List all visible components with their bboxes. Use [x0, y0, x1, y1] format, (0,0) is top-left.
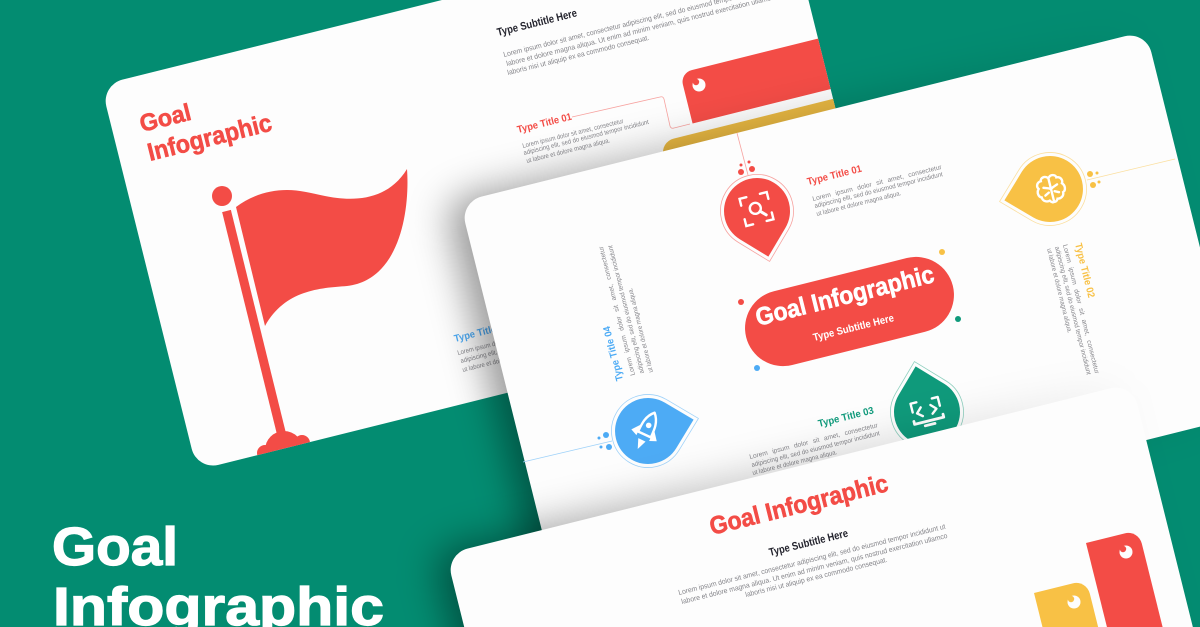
text block: type title 04: adipiscing elit, sed do eiusmod tempor incididunt: [607, 244, 646, 374]
icon: red flag on pole: [212, 169, 407, 469]
text block: type title 04: [598, 244, 655, 382]
shadow of front slide: [432, 381, 1200, 627]
text block: type title 03: adipiscing elit, sed do eiusmod tempor incididunt: [751, 430, 881, 469]
heading: main title: [52, 517, 384, 627]
text block: type title 02: adipiscing elit, sed do eiusmod tempor incididunt: [1053, 246, 1092, 376]
text block: type title 02: ut labore et dolore magna aliqua.: [1045, 248, 1073, 334]
text block: type title 03: ut labore et dolore magna aliqua.: [752, 449, 838, 477]
heading: main title: Goal: [52, 517, 178, 577]
connector line: title 01 to bar: [572, 97, 690, 128]
connector line: red pin: [737, 133, 748, 175]
text block: back slide type title 01: adipiscing elit, sed do eiusmod tempor incididunt: [523, 119, 650, 157]
chart: vertical tag bars: [1034, 530, 1177, 627]
panel: front slide: [446, 383, 1200, 627]
pin: green code monitor: [879, 353, 971, 456]
panel: middle slide with four pins: [460, 31, 1200, 587]
text block: type title 03: Lorem ipsum dolor sit amet, consectetur: [749, 422, 879, 461]
accent dots around pill: [738, 249, 961, 371]
heading: front slide title: Goal Infographic: [707, 469, 891, 541]
chart: horizontal tag bars: [663, 38, 836, 152]
text block: back slide type title 04: Lorem ipsum dolor sit amet, consectetur: [457, 325, 560, 357]
text block: type title 03: Type Title 03: [817, 405, 875, 430]
pin: blue rocket: [598, 383, 707, 475]
icon: rocket: [625, 407, 667, 455]
text block: front slide subtitle and paragraph: Lorem ipsum dolor sit amet, consectetur adipiscing elit, sed do eiusmod tempor incididunt ut: [677, 522, 946, 597]
text block: back slide type title 01: ut labore et dolore magna aliqua.: [526, 137, 611, 165]
text block: back slide type title 04: adipiscing elit, sed do eiusmod tempor incididunt: [460, 327, 587, 365]
text block: back slide subtitle and paragraph: laboris nisi ut aliquip ex ea commodo consequat.: [506, 33, 650, 77]
text block: back slide type title 01: Type Title 01: [516, 112, 573, 136]
text block: type title 01: Type Title 01: [806, 164, 863, 188]
text block: type title 04: Type Title 04: [602, 325, 626, 382]
text block: type title 02: [1045, 242, 1100, 376]
pin: yellow brain: [991, 145, 1100, 237]
connector line: blue pin: [523, 441, 612, 462]
text block: front slide subtitle and paragraph: laboris nisi ut aliquip ex ea commodo consequat.: [744, 555, 888, 599]
text block: type title 01: ut labore et dolore magna aliqua.: [816, 190, 902, 218]
title pill: goal infographic: [737, 249, 962, 374]
title pill: goal infographic: Type Subtitle Here: [812, 312, 895, 344]
text block: type title 02: Type Title 02: [1072, 242, 1096, 299]
text block: type title 02: Lorem ipsum dolor sit amet, consectetur: [1061, 244, 1100, 375]
text block: back slide subtitle and paragraph: Type Subtitle Here: [496, 7, 578, 39]
text block: back slide type title 04: [453, 321, 587, 374]
shadow of middle slide: [445, 31, 1200, 587]
text block: type title 01: [806, 164, 944, 218]
heading: back slide title: Goal: [137, 99, 194, 138]
text block: back slide type title 04: Type Title 04: [453, 321, 510, 345]
text block: type title 03: [749, 405, 881, 477]
text block: type title 01: Lorem ipsum dolor sit amet, consectetur: [812, 164, 943, 203]
icon: magnifier in brackets: [740, 192, 773, 226]
text block: back slide type title 01: Lorem ipsum dolor sit amet, consectetur: [522, 118, 625, 150]
text block: front slide subtitle and paragraph: labore et dolore magna aliqua. Ut enim ad minim veniam, quis nostrud exercitation ullamco: [680, 531, 948, 606]
title pill: goal infographic: Goal Infographic: [753, 260, 937, 332]
text block: back slide type title 04: ut labore et dolore magna aliqua.: [462, 346, 547, 374]
pin: red search: [713, 160, 805, 270]
heading: back slide title: Infographic: [145, 109, 275, 167]
text block: type title 04: Lorem ipsum dolor sit amet, consectetur: [598, 245, 637, 376]
text block: back slide type title 01: [516, 112, 650, 165]
text block: type title 04: ut labore et dolore magna aliqua.: [627, 287, 655, 373]
icon: monitor with code brackets: [910, 397, 945, 428]
connector line: yellow pin: [1087, 159, 1175, 180]
icon: brain: [1034, 173, 1068, 205]
text block: type title 01: adipiscing elit, sed do eiusmod tempor incididunt: [814, 171, 944, 210]
panel: back slide with flag: [101, 0, 893, 470]
text block: front slide subtitle and paragraph: Type Subtitle Here: [768, 528, 849, 559]
